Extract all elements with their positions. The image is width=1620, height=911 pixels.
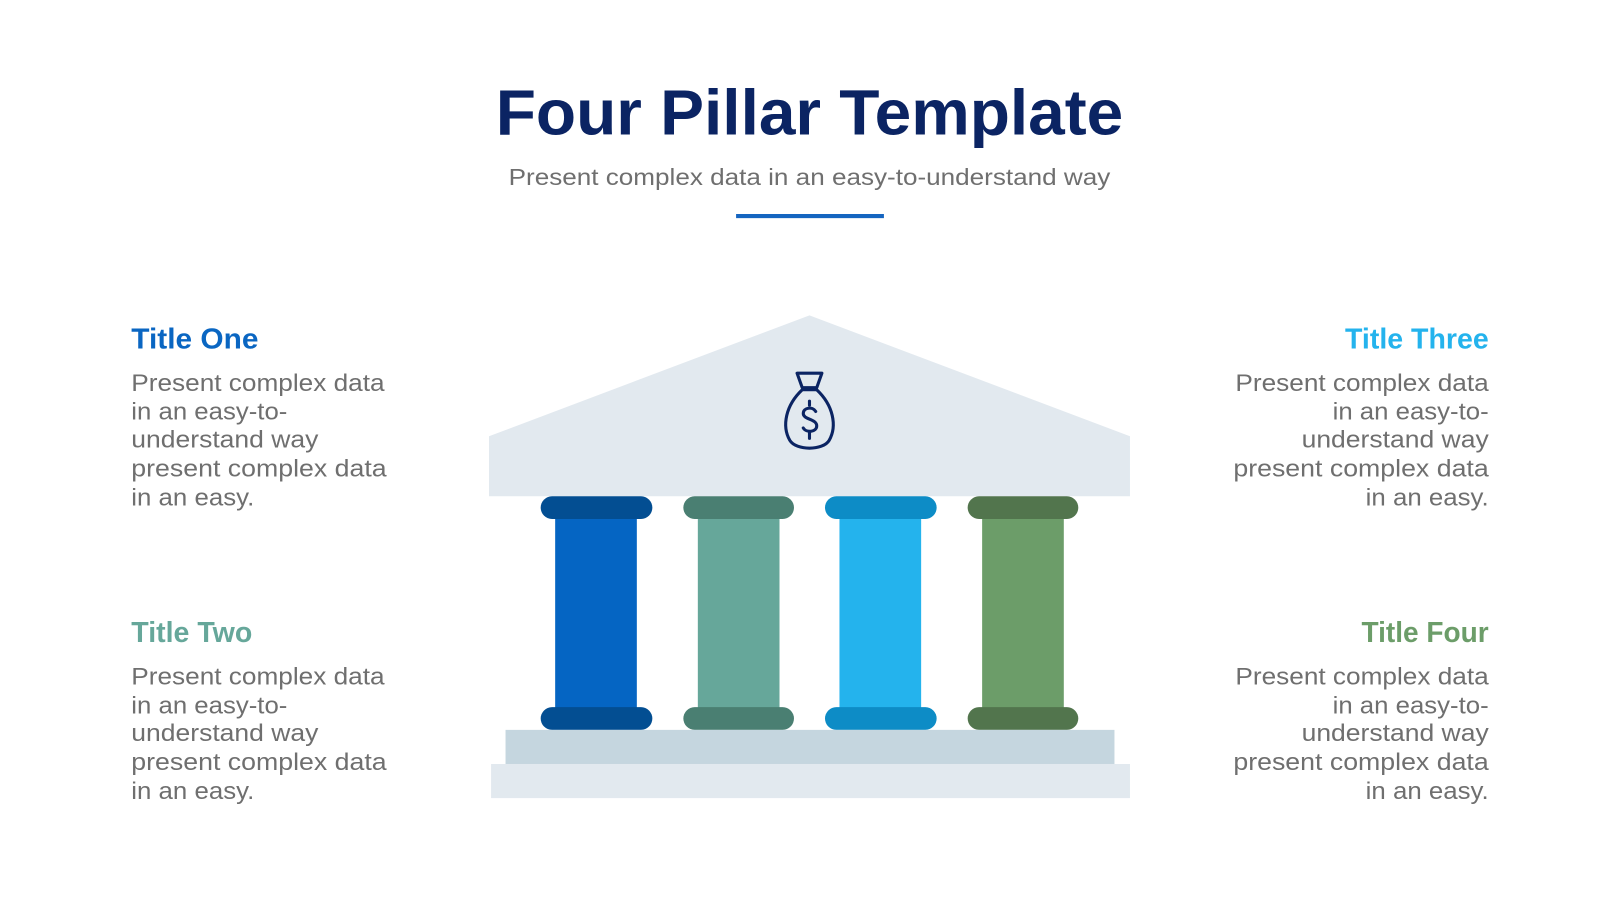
text block: title three: in an easy-to- bbox=[1333, 399, 1489, 426]
text block: title four: present complex data bbox=[1233, 749, 1490, 776]
base step upper bbox=[506, 730, 1114, 764]
text block: title three: Title Three bbox=[1345, 323, 1489, 355]
text block: title four: Present complex data bbox=[1235, 663, 1490, 690]
text block: title two: present complex data bbox=[131, 749, 388, 776]
text block: title one: in an easy. bbox=[131, 485, 254, 512]
text block: title one: present complex data bbox=[131, 456, 388, 483]
text block: title three: understand way bbox=[1302, 427, 1489, 454]
text block: title three: Present complex data bbox=[1235, 370, 1490, 397]
text block: title four: understand way bbox=[1302, 720, 1489, 747]
text block: title four: in an easy. bbox=[1366, 778, 1489, 805]
pillar 2 bbox=[683, 496, 794, 730]
text block: title three: present complex data bbox=[1233, 456, 1490, 483]
base step lower bbox=[491, 764, 1130, 798]
pillar 1 bbox=[541, 496, 652, 730]
text block: title two bbox=[131, 617, 388, 805]
icon: money bag bbox=[786, 373, 833, 448]
text block: title one: Title One bbox=[131, 323, 258, 355]
text block: title two: understand way bbox=[131, 720, 319, 747]
title underline bbox=[736, 214, 884, 218]
pillar 4 bbox=[968, 496, 1078, 730]
text block: title one bbox=[131, 323, 388, 512]
subtitle: Present complex data in an easy-to-understand way bbox=[509, 164, 1111, 190]
title: Four Pillar Template bbox=[496, 76, 1123, 148]
text block: title two: in an easy. bbox=[131, 778, 254, 805]
text block: title four: Title Four bbox=[1362, 617, 1489, 649]
text block: title two: in an easy-to- bbox=[131, 692, 287, 719]
text block: title four bbox=[1233, 617, 1490, 805]
text block: title three bbox=[1233, 323, 1490, 512]
text block: title three: in an easy. bbox=[1366, 485, 1489, 512]
text block: title one: understand way bbox=[131, 427, 319, 454]
text block: title four: in an easy-to- bbox=[1333, 692, 1489, 719]
text block: title one: in an easy-to- bbox=[131, 399, 287, 426]
roof bbox=[489, 315, 1130, 496]
text block: title two: Present complex data bbox=[131, 663, 385, 690]
text block: title two: Title Two bbox=[131, 617, 252, 649]
building bbox=[489, 315, 1130, 798]
pillar 3 bbox=[825, 496, 937, 730]
text block: title one: Present complex data bbox=[131, 370, 385, 397]
